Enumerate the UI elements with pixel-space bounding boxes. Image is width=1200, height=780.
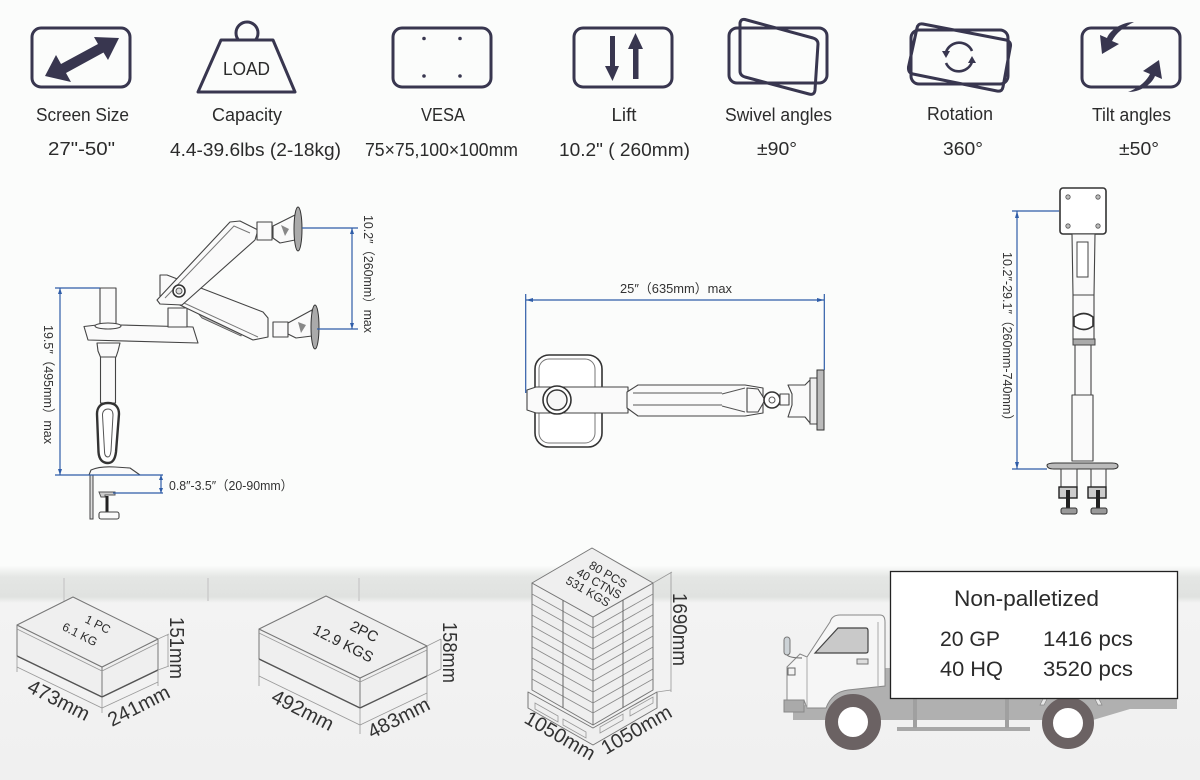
package: 1 pc carton: 1 PC <box>83 612 113 637</box>
package: pallet stack: 40 CTNS <box>574 565 624 602</box>
dimension: front height range <box>1000 211 1059 469</box>
panel: container loading: 1416 pcs <box>1043 628 1133 651</box>
front view drawing of monitor arm <box>1047 188 1118 514</box>
icon: lift arrows <box>574 28 672 87</box>
icon: swivel screens <box>729 19 827 94</box>
text: lift value: 10.2" ( 260mm) <box>559 140 690 160</box>
text: swivel label: Swivel angles <box>725 105 832 125</box>
text: rotation value: 360° <box>943 139 983 159</box>
dimension: clamp range <box>113 475 293 493</box>
icon: VESA plate <box>393 28 491 87</box>
package: 1 pc carton: 6.1 KG <box>60 620 100 649</box>
text: screen size label: Screen Size <box>36 105 129 125</box>
top view drawing of monitor arm <box>527 355 824 447</box>
text: screen size value: 27"-50" <box>48 139 115 159</box>
panel: container loading: 20 GP <box>940 628 1000 651</box>
panel: container loading: 3520 pcs <box>1043 658 1133 681</box>
package: 2 pc carton: 2PC <box>347 618 381 646</box>
dimension: front height range: 10.2″-29.1″（260mm-740mm） <box>1000 252 1015 427</box>
package: 2 pc carton <box>259 596 460 743</box>
dimension: arm reach: 25″（635mm）max <box>620 281 732 296</box>
dimension: arm height <box>41 288 140 475</box>
package: pallet stack <box>520 548 690 765</box>
package: pallet stack: 1050mm <box>520 707 599 765</box>
package: 2 pc carton: 492mm <box>268 686 337 736</box>
icon: screen size <box>32 28 130 87</box>
panel: container loading <box>890 572 1178 698</box>
package: 1 pc carton: 473mm <box>24 676 93 726</box>
panel: container loading: Non-palletized <box>954 586 1099 611</box>
package: pallet stack: 1690mm <box>668 593 690 666</box>
text: lift label: Lift <box>612 105 636 125</box>
package: 1 pc carton: 151mm <box>165 617 187 679</box>
dimension: arm lift: 10.2″（260mm）max <box>361 215 376 333</box>
package: pallet stack: 80 PCS <box>587 558 629 591</box>
panel: container loading: 40 HQ <box>940 658 1003 681</box>
dimension: arm reach <box>526 281 824 393</box>
icon: rotation screens <box>908 24 1011 91</box>
text: tilt value: ±50° <box>1119 139 1159 159</box>
text: tilt label: Tilt angles <box>1092 105 1171 125</box>
dimension: arm height: 19.5″（495mm）max <box>41 325 56 444</box>
illustration: truck <box>784 615 1177 744</box>
package: 2 pc carton: 483mm <box>364 694 434 743</box>
icon: load weight <box>198 22 295 92</box>
text: rotation label: Rotation <box>927 104 993 124</box>
text: VESA label: VESA <box>421 105 465 125</box>
dimension: arm lift <box>302 215 376 333</box>
dimension: clamp range: 0.8″-3.5″（20-90mm） <box>169 478 293 493</box>
side view drawing of monitor arm <box>84 207 319 519</box>
package: 2 pc carton: 12.9 KGS <box>310 622 376 666</box>
icon: tilt arrows <box>1082 22 1180 92</box>
text: capacity label: Capacity <box>212 105 282 125</box>
package: 2 pc carton: 158mm <box>438 622 460 683</box>
icon: load weight: LOAD <box>223 59 270 79</box>
package: pallet stack: 1050mm <box>598 701 676 759</box>
package: 1 pc carton: 241mm <box>104 682 174 731</box>
package: 1 pc carton <box>17 597 187 731</box>
text: capacity value: 4.4-39.6lbs (2-18kg) <box>170 140 341 160</box>
package: pallet stack: 531 KGS <box>563 573 613 610</box>
text: swivel value: ±90° <box>757 139 797 159</box>
text: VESA value: 75×75,100×100mm <box>365 140 518 160</box>
